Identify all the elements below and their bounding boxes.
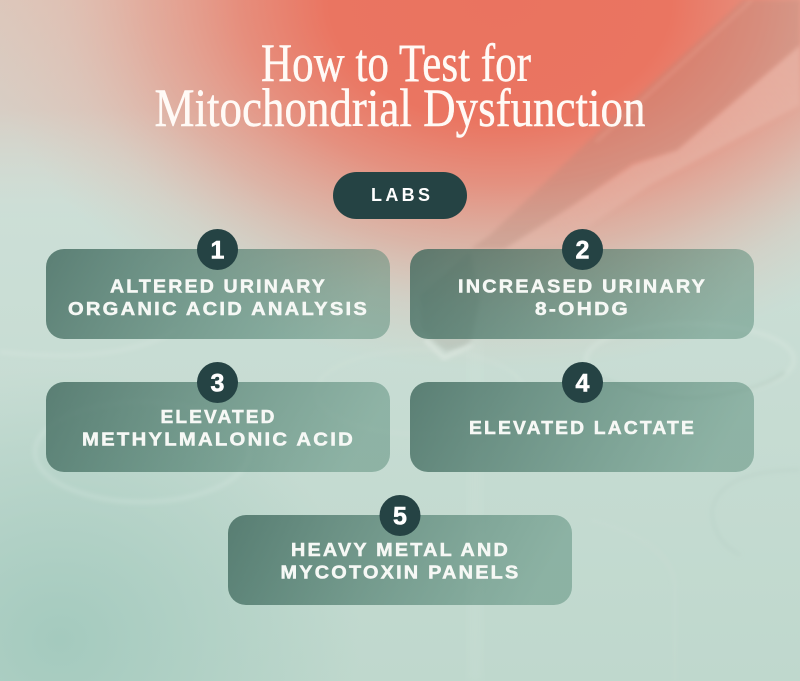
panel: item 2 — [410, 229, 754, 339]
badge 1: 1 — [211, 236, 225, 264]
badge 4: 4 — [576, 370, 590, 398]
label 2: INCREASED URINARY — [458, 276, 707, 296]
label 4: ELEVATED LACTATE — [469, 418, 696, 438]
badge 2 — [562, 229, 603, 270]
label 1 — [68, 276, 369, 319]
panel: item 1 — [46, 229, 390, 339]
badge 3 — [197, 362, 238, 403]
pill: labs: LABS — [371, 185, 430, 205]
label 5: MYCOTOXIN PANELS — [280, 562, 520, 582]
pill: labs — [333, 172, 467, 219]
label 3 — [82, 407, 355, 450]
badge 5 — [380, 495, 420, 536]
label 3: METHYLMALONIC ACID — [82, 430, 355, 450]
label 2 — [458, 276, 707, 319]
test tube rims — [0, 324, 800, 681]
panel: item 3 — [46, 362, 390, 472]
badge 4 — [562, 362, 603, 403]
title: How to Test for — [261, 33, 531, 93]
label 3: ELEVATED — [160, 407, 276, 427]
label 1: ORGANIC ACID ANALYSIS — [68, 299, 369, 319]
panel: item 4 — [410, 362, 754, 472]
badge 5: 5 — [393, 502, 407, 530]
label 5 — [280, 540, 520, 582]
badge 2: 2 — [576, 236, 589, 264]
title: Mitochondrial Dysfunction — [154, 78, 646, 138]
title — [154, 33, 646, 138]
label 5: HEAVY METAL AND — [291, 540, 510, 560]
label 1: ALTERED URINARY — [110, 276, 327, 296]
label 2: 8-OHDG — [535, 299, 630, 319]
badge 1 — [197, 229, 238, 270]
panel: item 5 — [228, 495, 572, 605]
pipette — [420, 0, 800, 358]
badge 3: 3 — [211, 370, 224, 398]
